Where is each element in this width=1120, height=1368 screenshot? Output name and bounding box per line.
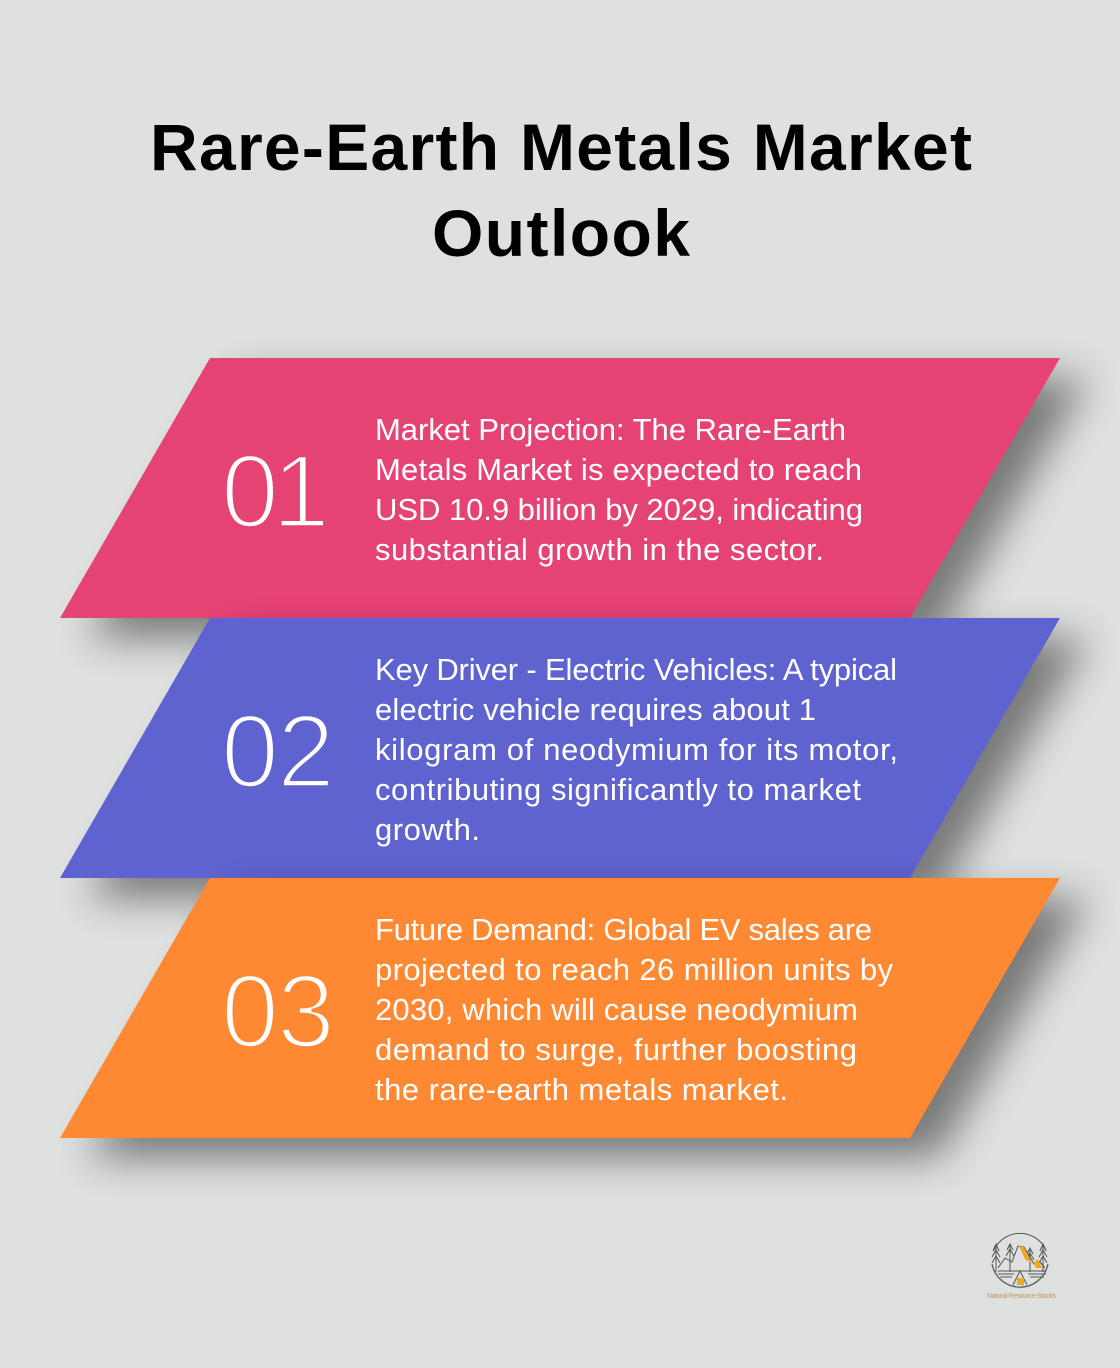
panel: 02 electric vehicles: Key Driver - Electric Vehicles: A typical xyxy=(375,652,897,687)
panel: 03 future demand: projected to reach 26 million units by xyxy=(375,952,894,987)
panel: 02 electric vehicles: kilogram of neodymium for its motor, xyxy=(375,732,898,767)
panel: 01 market projection: Market Projection: The Rare-Earth xyxy=(375,412,846,447)
panel: 02 electric vehicles: 02 xyxy=(221,694,335,810)
panel: 01 market projection: USD 10.9 billion by 2029, indicating xyxy=(375,492,863,527)
title: Rare-Earth Metals Market xyxy=(150,110,972,184)
panel: 03 future demand: demand to surge, further boosting xyxy=(375,1032,857,1067)
panel: 02 electric vehicles xyxy=(60,618,1088,898)
panel: 03 future demand: 2030, which will cause neodymium xyxy=(375,992,858,1027)
panel: 01 market projection xyxy=(60,358,1088,638)
panel: 01 market projection: substantial growth in the sector. xyxy=(375,532,824,567)
title: Outlook xyxy=(432,196,690,270)
panel: 02 electric vehicles: contributing significantly to market xyxy=(375,772,861,807)
panel: 03 future demand: the rare-earth metals market. xyxy=(375,1072,788,1107)
panel: 01 market projection: Metals Market is expected to reach xyxy=(375,452,862,487)
icon: Natural Resource Stocks logo xyxy=(987,1233,1056,1300)
panel: 02 electric vehicles: growth. xyxy=(375,812,480,847)
panel: 03 future demand: 03 xyxy=(221,954,335,1070)
title xyxy=(150,110,972,270)
panel: 01 market projection: 01 xyxy=(221,434,330,550)
panel: 02 electric vehicles: electric vehicle requires about 1 xyxy=(375,692,816,727)
panel: 03 future demand: Future Demand: Global EV sales are xyxy=(375,912,872,947)
panel: 03 future demand xyxy=(60,878,1088,1158)
icon: Natural Resource Stocks logo: Natural Resource Stocks xyxy=(987,1293,1056,1300)
